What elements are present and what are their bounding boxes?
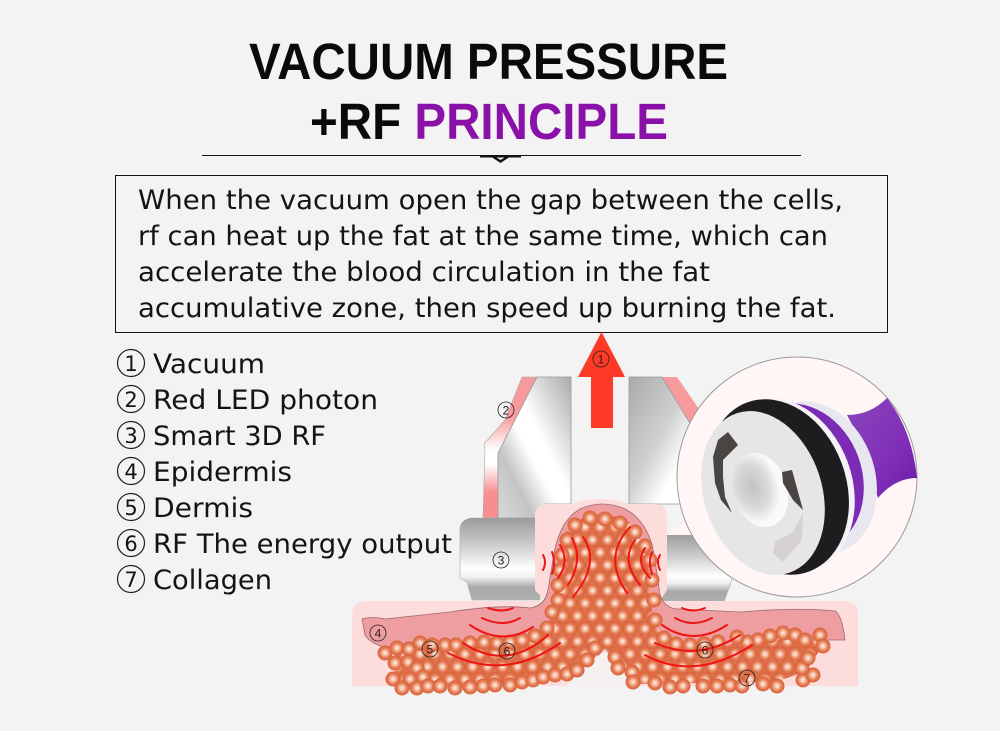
legend list: 4 [124,460,138,484]
legend list: 1 [124,352,138,376]
diagram: device and skin cross-section [352,332,917,696]
numbered markers: 1 [598,352,605,366]
legend list: 6 [124,532,138,556]
cup face [681,395,845,591]
numbered markers: 2 [503,404,510,418]
device upper right housing [629,377,710,504]
text box: description: When the vacuum open the gap between the cells, [138,185,843,216]
inner hole [723,446,797,534]
fat cells [378,510,830,696]
text box: description: accelerate the blood circulation in the fat [138,257,710,288]
title [249,33,728,150]
legend list: Red LED photon [153,385,378,416]
handle [847,398,917,498]
numbered markers: 4 [375,626,382,640]
title: +RF PRINCIPLE [310,93,668,150]
text box: description: rf can heat up the fat at the same time, which can [138,221,828,252]
RF energy waves [448,527,752,666]
white collar [734,385,896,571]
legend list: 7 [124,568,138,592]
legend list: Epidermis [153,457,292,488]
text box: description: accumulative zone, then speed up burning the fat. [138,293,836,324]
numbered markers: 5 [427,642,434,656]
title: VACUUM PRESSURE [249,33,728,90]
numbered markers [370,351,755,686]
numbered markers: 3 [498,554,505,568]
callout circle: cup head close-up [666,357,917,597]
white separator [687,378,879,594]
legend list: Smart 3D RF [153,421,326,452]
legend list [118,349,452,596]
text box: description [116,176,888,332]
device lower left RF block [460,518,540,600]
legend list: Vacuum [153,349,265,380]
purple band [716,385,884,571]
device upper left housing [483,377,571,518]
gap between fat lobes [565,650,635,686]
skin background panels [352,499,858,686]
electrode slots [713,432,738,513]
legend list: 2 [124,388,138,412]
title divider with notch [202,155,801,163]
arrow: vacuum suction [578,332,625,428]
legend list: RF The energy output [153,529,452,560]
epidermis layer [362,504,845,655]
legend list: Collagen [153,565,272,596]
numbered markers: 6 [504,644,511,658]
device lower right RF block [660,534,732,602]
legend list: 3 [124,424,138,448]
numbered markers: 7 [744,672,751,686]
legend list: Dermis [153,493,253,524]
legend list: 5 [124,496,138,520]
black rim [683,379,873,595]
numbered markers: 6 [702,644,709,658]
